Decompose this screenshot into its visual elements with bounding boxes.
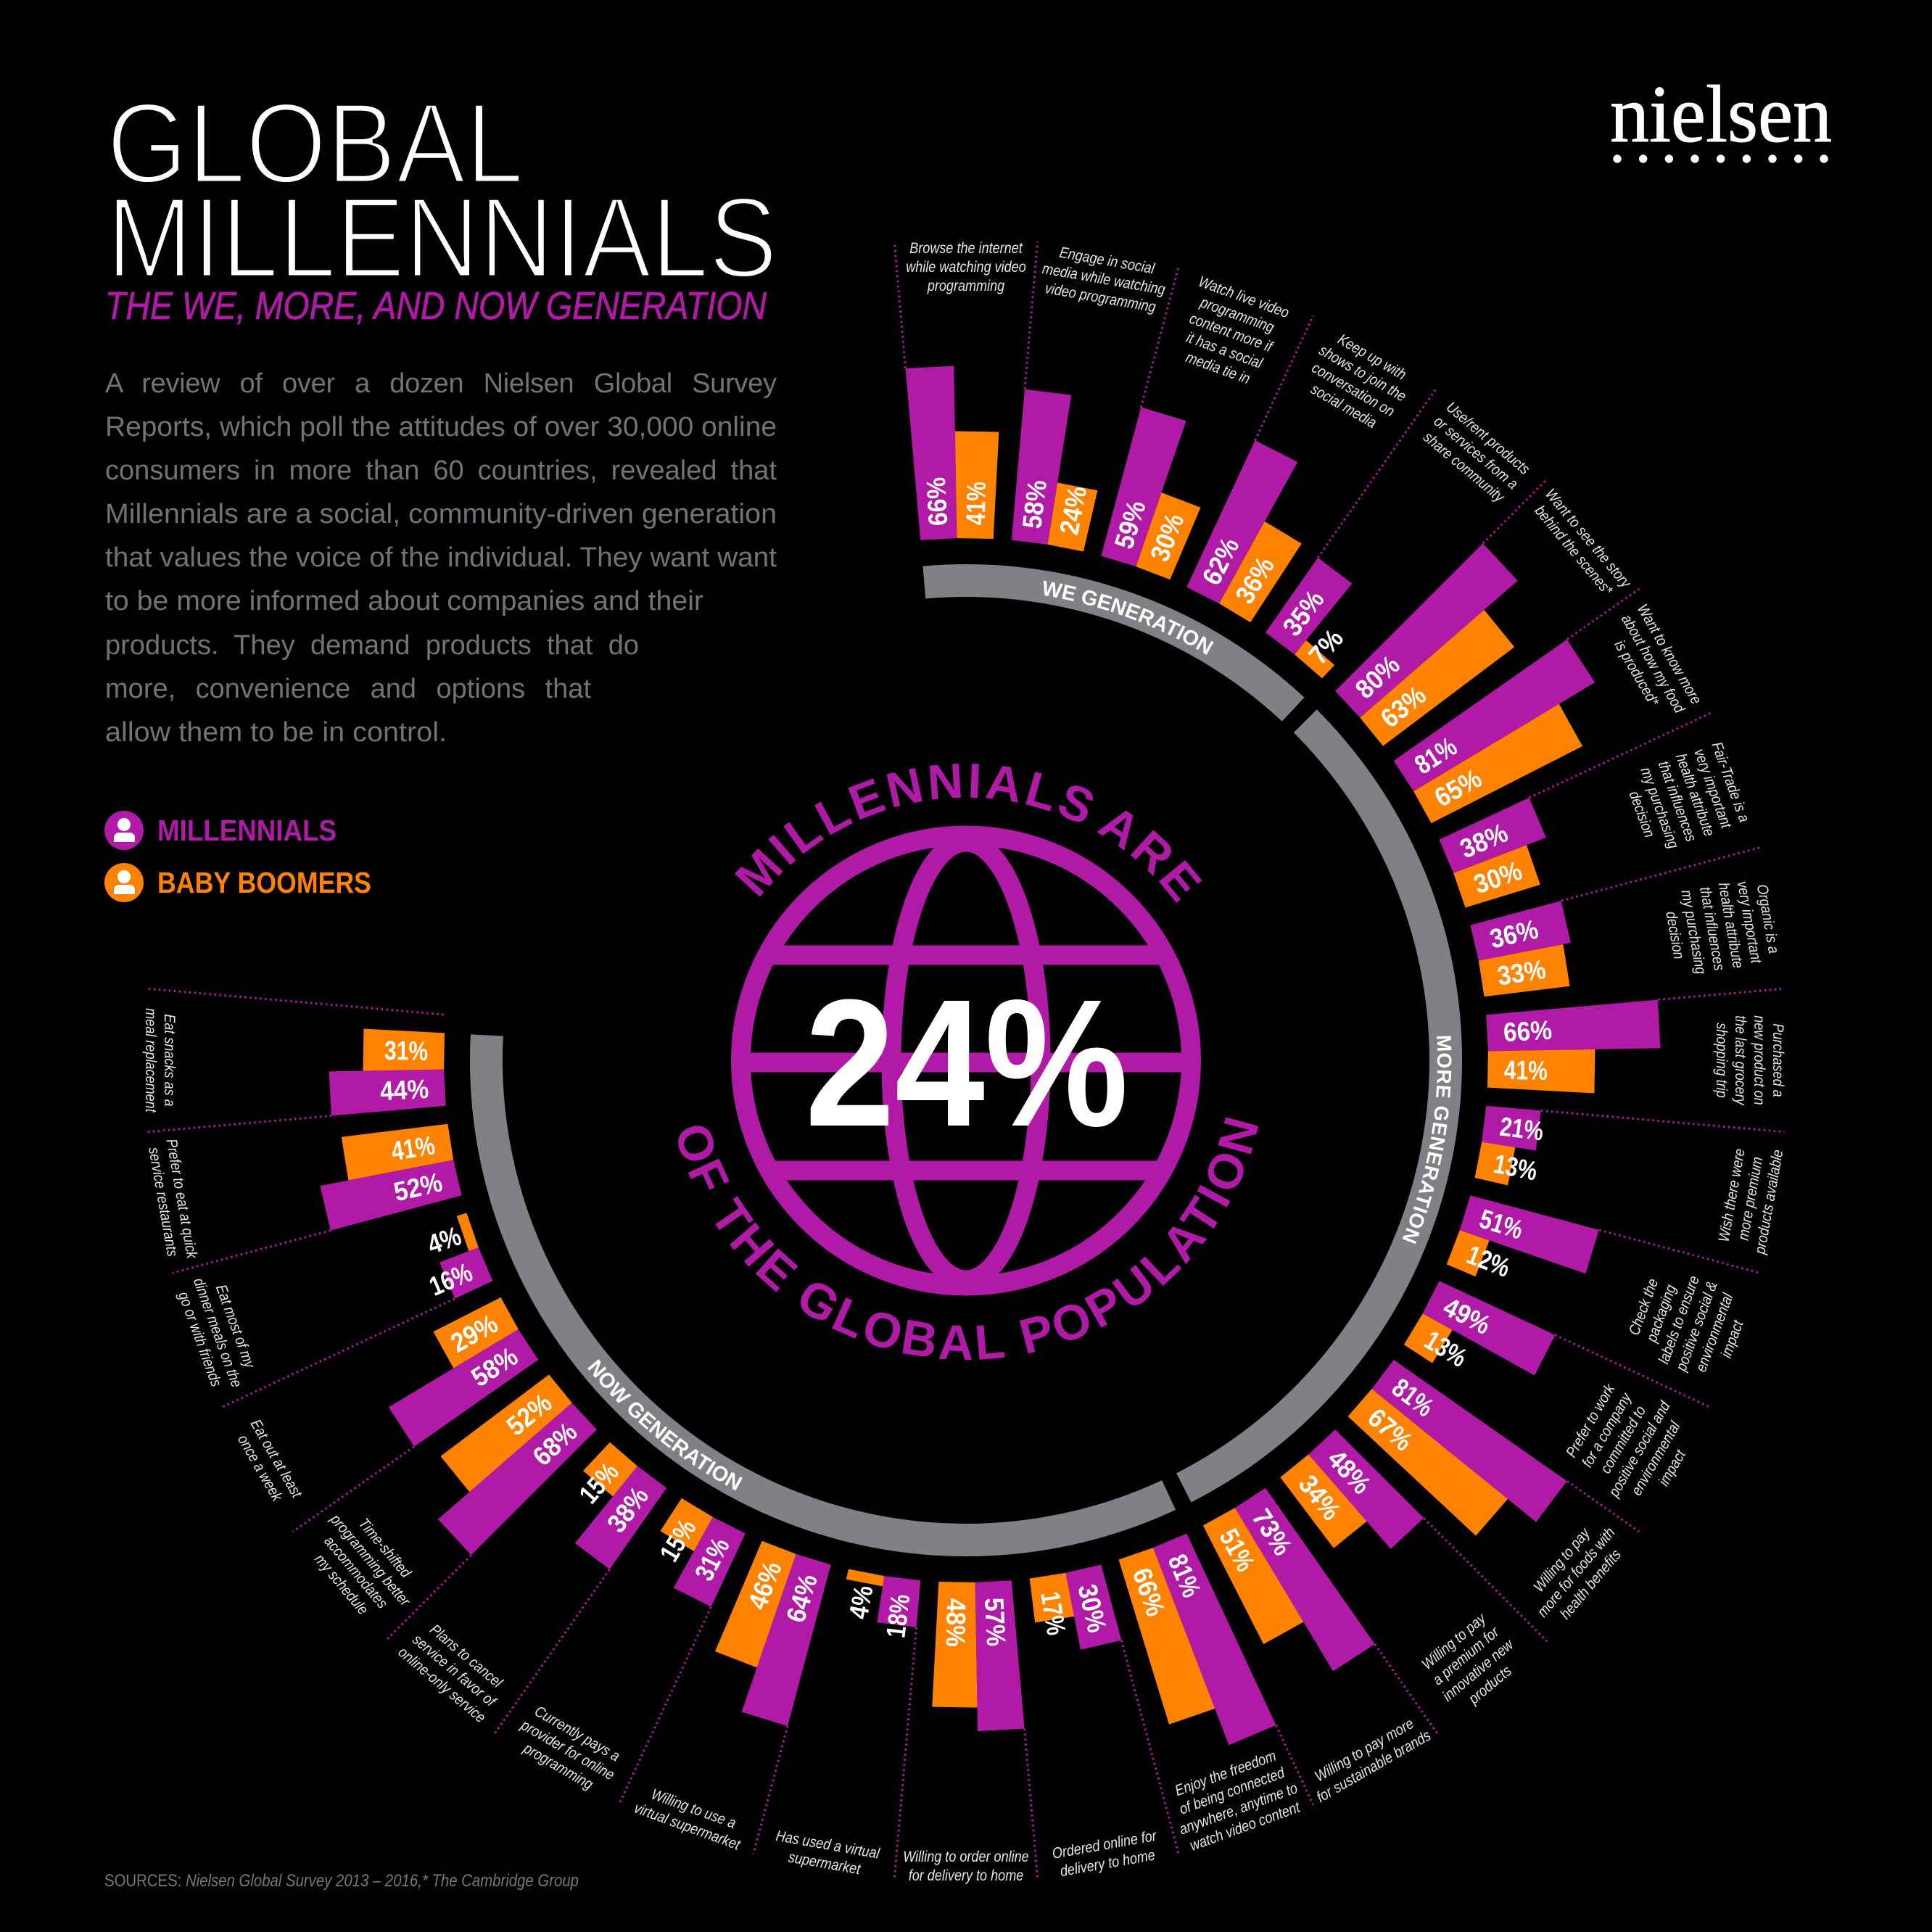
subtitle: THE WE, MORE, AND NOW GENERATION — [105, 284, 767, 328]
item: prefer to work for a company — [1382, 1279, 1714, 1523]
bar: boomers 51 — [1195, 1507, 1303, 1646]
item: prefer quick service restaurants — [133, 1067, 467, 1274]
caption: Has used a virtual — [775, 1828, 881, 1862]
legend: baby boomers: BABY BOOMERS — [157, 866, 371, 899]
caption: environmental — [1628, 1419, 1684, 1498]
legend: millennials — [104, 811, 337, 850]
value 73: 73% — [1247, 1503, 1297, 1561]
bar: millennials 51 — [1457, 1195, 1599, 1274]
value 4: 4% — [843, 1583, 879, 1622]
caption: Purchased a — [1770, 1023, 1786, 1097]
item: currently pays a provider — [504, 1476, 748, 1809]
title: MILLENNIALS — [107, 174, 777, 302]
bar: boomers 30 — [1453, 845, 1542, 913]
caption: shows to join the — [1316, 342, 1409, 405]
caption: labels to ensure — [1656, 1273, 1703, 1366]
bar: millennials 59 — [1101, 407, 1186, 569]
caption: programming — [927, 278, 1004, 294]
bar: boomers 52 — [439, 1367, 573, 1492]
bar: millennials 38 — [574, 1462, 667, 1569]
bar: millennials 16 — [438, 1244, 494, 1299]
caption: for sustainable brands — [1313, 1727, 1434, 1807]
value 13: 13% — [1419, 1325, 1472, 1373]
caption: is produced* — [1611, 637, 1662, 710]
item: purchased a new product — [1481, 988, 1795, 1131]
bar: millennials 80 — [1334, 543, 1519, 728]
nielsen logo: nielsen — [1610, 70, 1832, 160]
bar: millennials 36 — [1469, 901, 1572, 967]
caption: decision — [1625, 789, 1658, 840]
caption: Willing to order online — [903, 1849, 1029, 1865]
bar: millennials 18 — [877, 1576, 920, 1627]
value 30: 30% — [1470, 856, 1526, 899]
value 30: 30% — [1144, 509, 1189, 566]
item: wish more premium — [1470, 1105, 1788, 1257]
caption: innovative new — [1440, 1635, 1518, 1705]
bar: boomers 4 — [455, 1213, 479, 1251]
item: want to know more about food — [1389, 589, 1713, 869]
bar: boomers 46 — [714, 1538, 796, 1667]
bar: boomers 31 — [363, 1028, 445, 1071]
caption: decision — [1662, 910, 1688, 960]
value 63: 63% — [1375, 680, 1432, 733]
bar: millennials 62 — [1186, 440, 1298, 608]
bar: boomers 17 — [1027, 1572, 1074, 1624]
bar: millennials 44 — [328, 1062, 447, 1116]
caption: Want to see the story — [1542, 486, 1635, 592]
caption: my purchasing — [1677, 888, 1709, 975]
caption: it has a social — [1184, 329, 1265, 372]
bar: millennials 49 — [1419, 1281, 1555, 1376]
caption: conversation on — [1309, 359, 1398, 421]
caption: about how my food — [1618, 611, 1688, 717]
value 52: 52% — [391, 1167, 445, 1207]
caption: while watching video — [906, 259, 1026, 276]
caption: impact — [1655, 1446, 1690, 1489]
bar: boomers 4 — [846, 1569, 885, 1586]
item: want to see the story — [1331, 479, 1643, 790]
bar: millennials 66 — [906, 364, 969, 541]
value 62: 62% — [1197, 533, 1245, 590]
caption: Use/rent products — [1442, 399, 1533, 478]
value 81: 81% — [1409, 731, 1462, 780]
value 51: 51% — [1213, 1524, 1260, 1577]
caption: accommodates — [321, 1533, 391, 1612]
value 7: 7% — [1303, 623, 1349, 670]
caption: positive social and — [1605, 1398, 1674, 1500]
caption: Want to know more — [1633, 601, 1705, 707]
value 65: 65% — [1429, 763, 1487, 813]
caption: packaging — [1643, 1282, 1680, 1345]
intro text block: Reports, which poll the attitudes of over 30,000 online — [105, 412, 777, 442]
value 66: 66% — [1503, 1015, 1553, 1047]
curved heading bottom: OF THE GLOBAL POPULATION — [678, 1117, 1259, 1361]
value 15: 15% — [654, 1514, 702, 1566]
arc label: we generation: WE GENERATION — [1044, 580, 1214, 655]
caption: Wish there were — [1715, 1147, 1749, 1243]
arc: more generation — [1184, 721, 1445, 1487]
legend: baby boomers — [104, 863, 371, 902]
caption: media tie in — [1184, 349, 1252, 388]
bar: millennials 58 — [1012, 389, 1071, 545]
caption: for a company — [1579, 1390, 1635, 1471]
value 30: 30% — [1072, 1581, 1112, 1635]
bar: boomers 34 — [1276, 1453, 1367, 1549]
bar: millennials 81 — [1140, 1532, 1276, 1747]
caption: that influences — [1655, 759, 1700, 844]
item: eat snacks as a meal replacement — [131, 963, 452, 1132]
bar: millennials 58 — [387, 1321, 540, 1447]
value 15: 15% — [574, 1457, 624, 1509]
value 31: 31% — [689, 1533, 735, 1585]
caption: provider for online — [517, 1717, 617, 1784]
caption: a premium for — [1429, 1623, 1503, 1688]
caption: meal replacement — [142, 1008, 159, 1113]
caption: Willing to pay — [1530, 1524, 1594, 1595]
intro text block: products. They demand products that do — [105, 630, 639, 661]
value 44: 44% — [379, 1074, 429, 1106]
caption: for delivery to home — [909, 1867, 1023, 1884]
item: pay more for foods with health benefits — [1316, 1356, 1643, 1638]
caption: very important — [1690, 747, 1735, 831]
caption: watch video content — [1188, 1799, 1303, 1854]
bar: millennials 64 — [741, 1551, 831, 1726]
value 13: 13% — [1491, 1149, 1540, 1186]
item: engage in social media — [1011, 241, 1171, 557]
caption: Organic is a — [1753, 883, 1782, 955]
arc label: now generation: NOW GENERATION — [587, 1359, 743, 1491]
caption: social media — [1308, 381, 1379, 432]
caption: Keep up with — [1335, 331, 1409, 384]
caption: content more if — [1187, 310, 1276, 356]
caption: virtual supermarket — [632, 1799, 743, 1854]
value 12: 12% — [1463, 1239, 1514, 1283]
value 52: 52% — [501, 1387, 558, 1441]
sources: SOURCES: Nielsen Global Survey 2013 – 2016,* The Cambridge Group — [104, 1871, 579, 1891]
caption: Watch live video — [1196, 273, 1292, 322]
item: check the packaging — [1434, 1194, 1763, 1389]
caption: my schedule — [311, 1551, 371, 1618]
value 66: 66% — [1127, 1564, 1171, 1620]
value 59: 59% — [1109, 497, 1152, 552]
caption: media while watching — [1041, 260, 1167, 299]
caption: the last grocery — [1732, 1015, 1749, 1106]
caption: service restaurants — [145, 1146, 181, 1258]
value 36: 36% — [1229, 552, 1280, 608]
value 81: 81% — [1163, 1550, 1207, 1601]
bar: boomers 15 — [582, 1440, 638, 1497]
value 58: 58% — [466, 1341, 523, 1392]
caption: Eat out at least — [247, 1416, 306, 1502]
caption: health benefits — [1557, 1546, 1625, 1622]
item: fair-trade — [1434, 713, 1760, 946]
value 67: 67% — [1362, 1403, 1419, 1457]
bar: boomers 13 — [1474, 1142, 1515, 1186]
caption: Willing to use a — [649, 1786, 738, 1832]
caption: very important — [1733, 880, 1765, 965]
item: willing to order online — [877, 1574, 1038, 1895]
bar: millennials 30 — [1060, 1564, 1121, 1651]
caption: shopping trip — [1713, 1023, 1730, 1098]
value 68: 68% — [527, 1416, 583, 1471]
bar: millennials 81 — [1363, 1359, 1567, 1523]
bar: boomers 29 — [432, 1293, 519, 1368]
legend: millennials: MILLENNIALS — [157, 814, 337, 847]
value 46: 46% — [742, 1558, 788, 1614]
title — [107, 80, 777, 302]
caption: behind the scenes* — [1531, 503, 1617, 600]
bar: millennials 73 — [1224, 1487, 1375, 1672]
caption: Enjoy the freedom — [1173, 1747, 1279, 1800]
big number: 24% — [805, 962, 1128, 1164]
value 48: 48% — [1322, 1444, 1376, 1500]
arc label: more generation: MORE GENERATION — [1403, 1036, 1452, 1244]
value 33: 33% — [1495, 954, 1548, 991]
caption: that influences — [1696, 886, 1727, 972]
item: ordered online for delivery — [980, 1559, 1180, 1890]
bar: boomers 24 — [1047, 483, 1098, 552]
item: pay more for sustainable brands — [1151, 1483, 1440, 1815]
caption: Currently pays a — [532, 1703, 623, 1765]
item: use rent products — [1263, 387, 1538, 708]
bar: millennials 35 — [1265, 558, 1353, 658]
caption: products available — [1751, 1148, 1787, 1256]
value 38: 38% — [1456, 817, 1512, 864]
caption: video programming — [1044, 280, 1157, 316]
value 35: 35% — [1277, 585, 1330, 641]
item: browse the internet — [894, 229, 1052, 545]
value 41: 41% — [961, 482, 991, 525]
value 58: 58% — [1017, 479, 1052, 530]
value 64: 64% — [780, 1571, 823, 1626]
bar: boomers 12 — [1446, 1230, 1490, 1277]
bar: millennials 66 — [1485, 1000, 1662, 1063]
caption: products — [1465, 1662, 1515, 1708]
item: eat out at least once a week — [224, 1262, 542, 1533]
caption: Prefer to eat at quick — [162, 1138, 200, 1260]
caption: delivery to home — [1059, 1846, 1157, 1881]
item: keep up with shows — [1184, 315, 1422, 643]
bar: boomers 41 — [1487, 1049, 1596, 1095]
caption: new product on — [1751, 1015, 1767, 1105]
caption: online-only service — [395, 1643, 489, 1727]
intro text block: more, convenience and options that — [105, 674, 591, 704]
bar: boomers 41 — [955, 430, 1001, 540]
caption: service in favor of — [409, 1631, 500, 1712]
arc: we generation — [924, 580, 1293, 709]
title: GLOBAL — [107, 80, 524, 207]
bar: boomers 15 — [660, 1497, 714, 1551]
value 81: 81% — [1387, 1373, 1440, 1422]
intro text block: that values the voice of the individual. They want want — [105, 542, 777, 573]
value 51: 51% — [1476, 1204, 1527, 1245]
item: organic — [1465, 847, 1791, 1038]
bar: millennials 81 — [1392, 640, 1596, 804]
value 80: 80% — [1350, 650, 1405, 704]
intro text block: A review of over a dozen Nielsen Global Survey — [105, 368, 777, 399]
value 17: 17% — [1035, 1590, 1071, 1637]
caption: of being connected — [1177, 1764, 1288, 1818]
value 38: 38% — [601, 1482, 654, 1538]
caption: Time-shifted — [355, 1515, 415, 1582]
value 49: 49% — [1439, 1292, 1495, 1340]
bar: boomers 67 — [1340, 1388, 1508, 1537]
caption: Check the — [1626, 1276, 1662, 1337]
caption: environmental — [1693, 1291, 1737, 1374]
value 41: 41% — [1504, 1055, 1548, 1086]
caption: once a week — [234, 1432, 286, 1505]
value 41: 41% — [389, 1130, 437, 1166]
value 21: 21% — [1498, 1112, 1545, 1147]
caption: positive social & — [1672, 1279, 1721, 1374]
item: watch live video — [1099, 267, 1294, 592]
bar: boomers 13 — [1403, 1313, 1453, 1364]
value 34: 34% — [1293, 1469, 1347, 1526]
value 57: 57% — [979, 1597, 1011, 1647]
caption: more for foods with — [1534, 1524, 1619, 1621]
caption: Browse the internet — [909, 240, 1023, 257]
bar: boomers 63 — [1359, 610, 1516, 755]
bar: boomers 66 — [1107, 1547, 1215, 1726]
bar: millennials 68 — [437, 1394, 598, 1555]
caption: Eat snacks as a — [161, 1014, 178, 1107]
caption: programming better — [326, 1511, 414, 1610]
caption: anywhere, anytime to — [1177, 1780, 1300, 1838]
bar: boomers 7 — [1294, 640, 1335, 680]
value 48: 48% — [941, 1598, 971, 1647]
bar: millennials 52 — [318, 1151, 463, 1231]
value 24: 24% — [1054, 484, 1092, 537]
caption: programming — [1197, 294, 1276, 337]
value 16: 16% — [425, 1258, 476, 1302]
bar: millennials 31 — [673, 1514, 746, 1607]
caption: impact — [1718, 1317, 1747, 1361]
caption: go or with friends — [175, 1289, 225, 1389]
bar: boomers 36 — [1218, 521, 1303, 626]
item: eat most dinner meals on the go — [163, 1162, 498, 1409]
arc: now generation — [486, 1035, 1169, 1540]
caption: or services from a — [1430, 413, 1521, 493]
bar: millennials 48 — [1303, 1429, 1424, 1550]
intro text block — [105, 368, 777, 748]
caption: Willing to pay — [1419, 1610, 1490, 1673]
item: has used a virtual supermarket — [770, 1564, 921, 1883]
legend — [104, 811, 371, 902]
caption: committed to — [1597, 1403, 1649, 1477]
value 31: 31% — [384, 1036, 428, 1066]
bar: boomers 65 — [1413, 704, 1584, 833]
caption: more premium — [1735, 1155, 1767, 1242]
intro text block: Millennials are a social, community-driven generation — [105, 499, 777, 529]
bar: millennials 21 — [1482, 1106, 1541, 1151]
caption: share community — [1420, 429, 1508, 506]
bar: boomers 41 — [340, 1117, 455, 1181]
curved heading top: MILLENNIALS ARE — [735, 763, 1202, 903]
caption: programming — [520, 1740, 596, 1793]
caption: health attribute — [1672, 751, 1717, 838]
value 18: 18% — [880, 1593, 915, 1640]
bar: boomers 30 — [1136, 492, 1201, 582]
caption: my purchasing — [1637, 765, 1682, 851]
caption: dinner meals on the — [189, 1276, 245, 1390]
item: time-shifted programming — [290, 1334, 600, 1644]
intro text block: to be more informed about companies and their — [105, 586, 703, 616]
caption: supermarket — [787, 1849, 863, 1878]
caption: health attribute — [1714, 881, 1746, 970]
caption: Fair-Trade is a — [1708, 740, 1753, 825]
intro text block: allow them to be in control. — [105, 717, 447, 748]
value 66: 66% — [921, 476, 953, 527]
caption: Ordered online for — [1051, 1827, 1159, 1862]
caption: Plans to cancel — [426, 1621, 506, 1691]
value 36: 36% — [1487, 915, 1541, 954]
item: premium for innovative products — [1250, 1426, 1549, 1725]
bar: millennials 38 — [1438, 798, 1548, 880]
caption: Prefer to work — [1563, 1381, 1619, 1461]
caption: Eat most of my — [212, 1282, 258, 1371]
value 4: 4% — [424, 1221, 465, 1260]
item: plans to cancel service — [389, 1411, 669, 1737]
item: enjoy the freedom — [1063, 1528, 1316, 1866]
caption: Willing to pay more — [1312, 1715, 1417, 1786]
bar: millennials 57 — [965, 1580, 1025, 1733]
bar: boomers 48 — [930, 1581, 978, 1709]
bar: boomers 33 — [1477, 944, 1572, 1002]
value 29: 29% — [446, 1308, 503, 1358]
intro text block: consumers in more than 60 countries, revealed that — [105, 455, 777, 486]
caption: Engage in social — [1058, 244, 1156, 278]
item: willing to use a virtual supermarket — [629, 1526, 833, 1858]
globe icon — [741, 835, 1191, 1286]
